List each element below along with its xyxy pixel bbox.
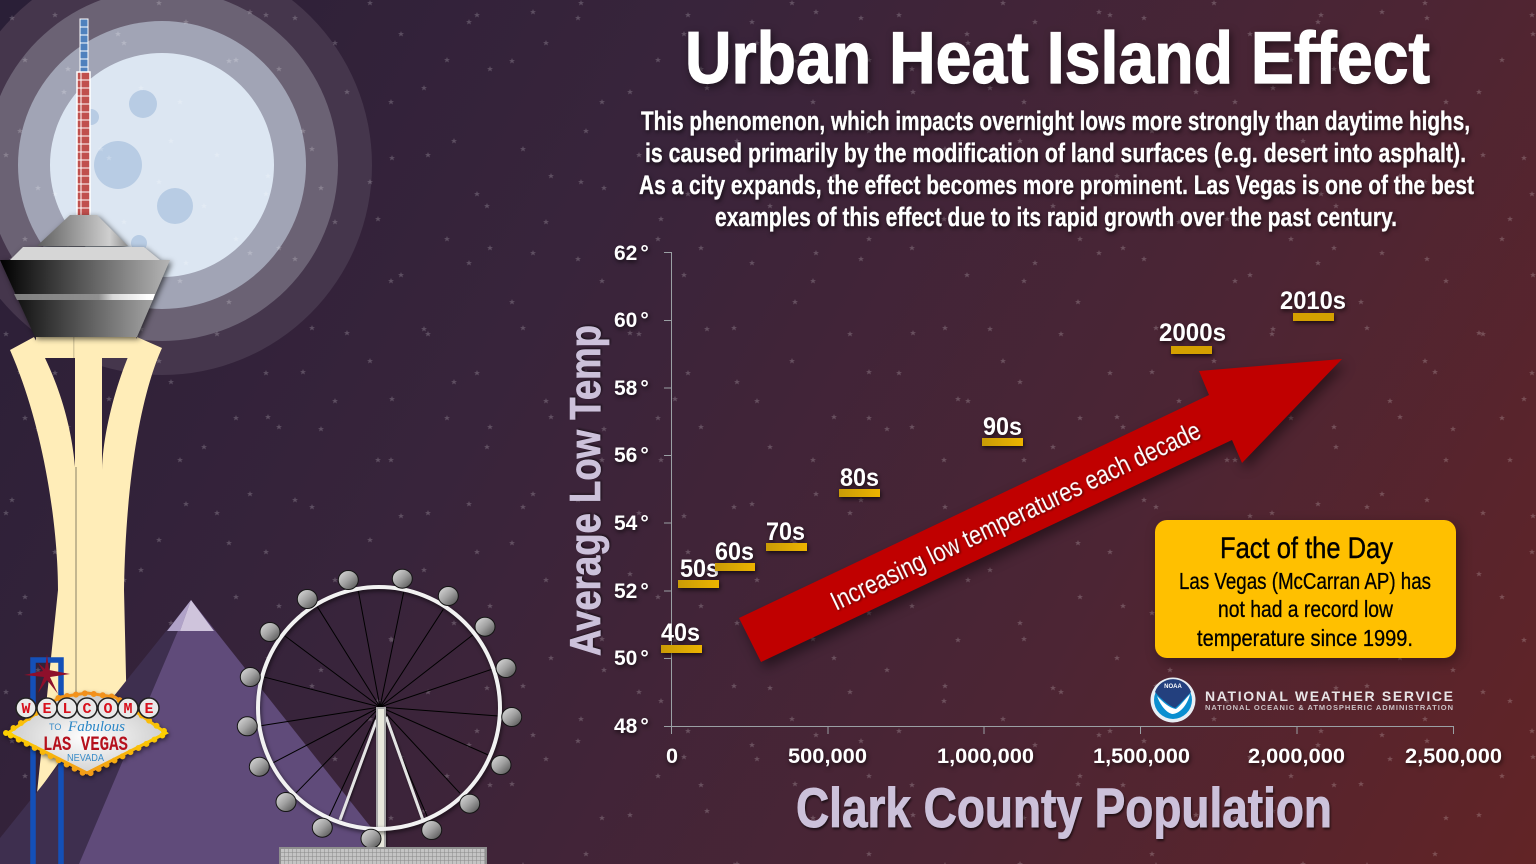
callout body: Las Vegas (McCarran AP) has xyxy=(1179,568,1431,594)
sign star xyxy=(24,654,70,694)
x axis tick labels: 1,000,000 xyxy=(937,745,1034,768)
60s: 60s xyxy=(715,538,754,566)
tower legs xyxy=(10,337,162,793)
2000s: 2000s xyxy=(1159,319,1226,347)
y axis tick labels: 48° xyxy=(614,715,649,738)
ferris wheel xyxy=(237,569,522,864)
welcome to las vegas sign: LAS VEGAS xyxy=(43,734,128,757)
welcome to las vegas sign xyxy=(6,654,167,864)
x axis tick labels: 2,500,000 xyxy=(1405,745,1502,768)
welcome to las vegas sign: Fabulous xyxy=(67,719,125,735)
chart axes xyxy=(664,252,1454,734)
50s: 50s xyxy=(680,555,719,583)
y axis tick labels: 58° xyxy=(614,377,649,400)
fact of the day callout xyxy=(1155,520,1456,658)
y axis tick labels xyxy=(614,242,649,738)
wheel rim xyxy=(258,587,500,829)
welcome to las vegas sign: L xyxy=(62,701,72,718)
2010s: 2010s xyxy=(1280,287,1346,315)
y axis tick labels: 54° xyxy=(614,512,649,535)
y axis title: Average Low Temp xyxy=(561,325,610,656)
welcome to las vegas sign: O xyxy=(103,701,113,718)
90s: 90s xyxy=(983,413,1022,441)
welcome to las vegas sign: TO xyxy=(49,722,61,732)
gondolas xyxy=(237,569,522,848)
trend arrow xyxy=(739,359,1342,662)
national weather service wordmark xyxy=(1205,688,1453,712)
callout body: not had a record low xyxy=(1218,596,1393,622)
welcome to las vegas sign: W xyxy=(21,701,31,718)
x axis tick labels: 0 xyxy=(666,745,678,768)
welcome to las vegas sign: E xyxy=(42,701,52,718)
decade markers xyxy=(661,287,1346,653)
x axis tick labels: 2,000,000 xyxy=(1248,745,1345,768)
x axis tick labels xyxy=(666,745,1502,768)
description text xyxy=(639,106,1474,232)
80s: 80s xyxy=(840,464,879,492)
callout body: temperature since 1999. xyxy=(1197,625,1413,651)
moon xyxy=(0,0,372,375)
stratosphere tower xyxy=(0,19,170,793)
observation pod xyxy=(0,215,170,337)
y axis tick labels: 56° xyxy=(614,444,649,467)
wheel base xyxy=(280,848,486,864)
x axis title: Clark County Population xyxy=(796,776,1332,839)
national weather service wordmark: NATIONAL OCEANIC & ATMOSPHERIC ADMINISTRATION xyxy=(1205,703,1453,712)
x axis tick labels: 500,000 xyxy=(788,745,867,768)
noaa logo: NOAA xyxy=(1164,684,1182,690)
antenna xyxy=(77,19,90,216)
welcome to las vegas sign: C xyxy=(82,701,92,718)
title: Urban Heat Island Effect xyxy=(685,18,1430,99)
pyramid xyxy=(0,600,400,864)
welcome to las vegas sign: E xyxy=(144,701,154,718)
welcome to las vegas sign: M xyxy=(123,701,133,718)
y axis tick labels: 62° xyxy=(614,242,649,265)
national weather service wordmark: NATIONAL WEATHER SERVICE xyxy=(1205,688,1453,704)
arrow label: Increasing low temperatures each decade xyxy=(826,415,1205,616)
callout body xyxy=(1179,568,1431,651)
y axis tick labels: 50° xyxy=(614,647,649,670)
spokes xyxy=(261,591,498,817)
callout heading: Fact of the Day xyxy=(1220,532,1393,565)
welcome to las vegas sign: NEVADA xyxy=(67,753,104,764)
y axis tick labels: 60° xyxy=(614,309,649,332)
support legs xyxy=(340,708,423,848)
x axis tick labels: 1,500,000 xyxy=(1093,745,1190,768)
noaa logo xyxy=(1150,678,1196,722)
40s: 40s xyxy=(661,619,700,647)
70s: 70s xyxy=(766,518,805,546)
y axis tick labels: 52° xyxy=(614,580,649,603)
